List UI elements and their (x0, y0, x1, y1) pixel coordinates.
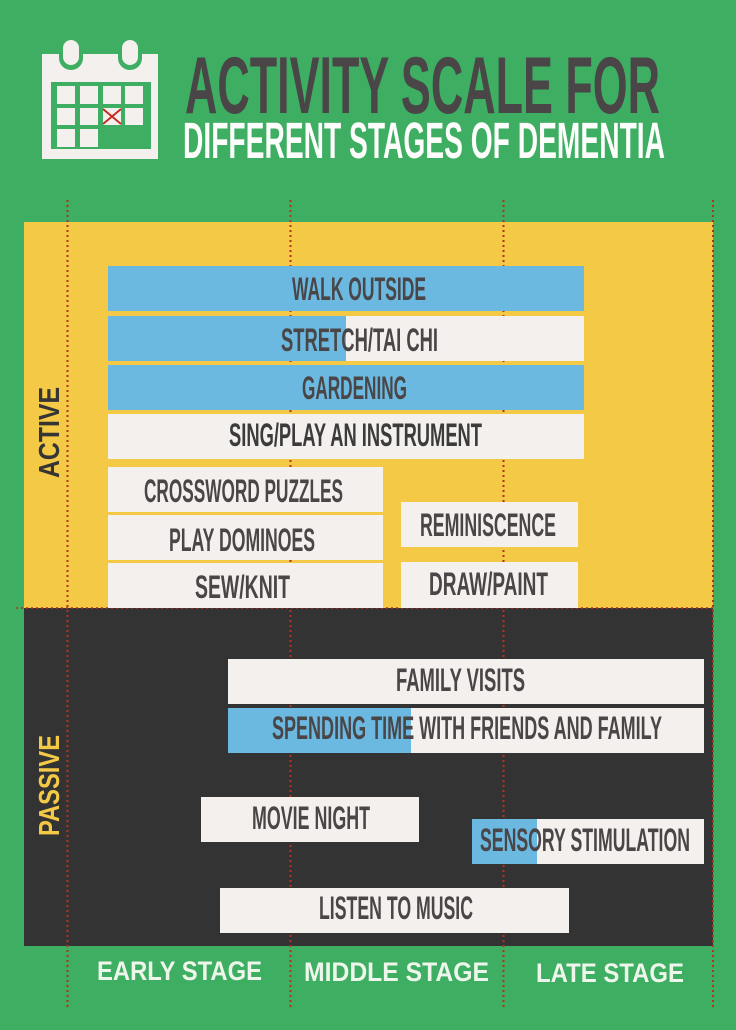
bar: crossword puzzles (108, 467, 383, 512)
bar: draw/paint: DRAW/PAINT (429, 566, 548, 602)
bar: gardening (108, 365, 584, 410)
panel: passive (24, 608, 713, 946)
stage divider lines (16, 200, 714, 1010)
bar: family visits: FAMILY VISITS (396, 662, 525, 698)
bar: spending time with friends and family (228, 708, 704, 753)
bar: listen to music: LISTEN TO MUSIC (319, 890, 473, 926)
label: middle stage: MIDDLE STAGE (304, 957, 489, 987)
bar: play dominoes (108, 515, 383, 560)
bar: sing/play an instrument (108, 414, 584, 459)
title (183, 41, 665, 169)
bar: reminiscence: REMINISCENCE (420, 507, 556, 543)
bar: family visits (228, 659, 704, 704)
bar: sew/knit (108, 563, 383, 608)
bar: gardening: GARDENING (302, 370, 407, 406)
bar: listen to music (220, 888, 569, 933)
bar: sensory stimulation (472, 819, 704, 864)
bar: walk outside (108, 266, 584, 311)
bar: reminiscence (401, 502, 578, 547)
panel: active (24, 222, 713, 608)
icon: calendar (42, 40, 158, 159)
bar: walk outside: WALK OUTSIDE (292, 271, 426, 307)
bar: movie night (201, 797, 419, 842)
label: late stage: LATE STAGE (536, 958, 684, 988)
label: active: ACTIVE (34, 387, 66, 478)
bar: sew/knit: SEW/KNIT (195, 569, 290, 605)
bar: draw/paint (401, 562, 578, 608)
label: early stage: EARLY STAGE (97, 956, 262, 986)
label: passive: PASSIVE (34, 735, 66, 836)
bar: sing/play an instrument: SING/PLAY AN INSTRUMENT (229, 417, 482, 453)
bar: stretch/tai chi (108, 316, 584, 361)
bar: crossword puzzles: CROSSWORD PUZZLES (144, 473, 343, 509)
bar: stretch/tai chi: STRETCH/TAI CHI (281, 322, 438, 358)
bar: movie night: MOVIE NIGHT (252, 800, 370, 836)
bar: play dominoes: PLAY DOMINOES (169, 522, 315, 558)
